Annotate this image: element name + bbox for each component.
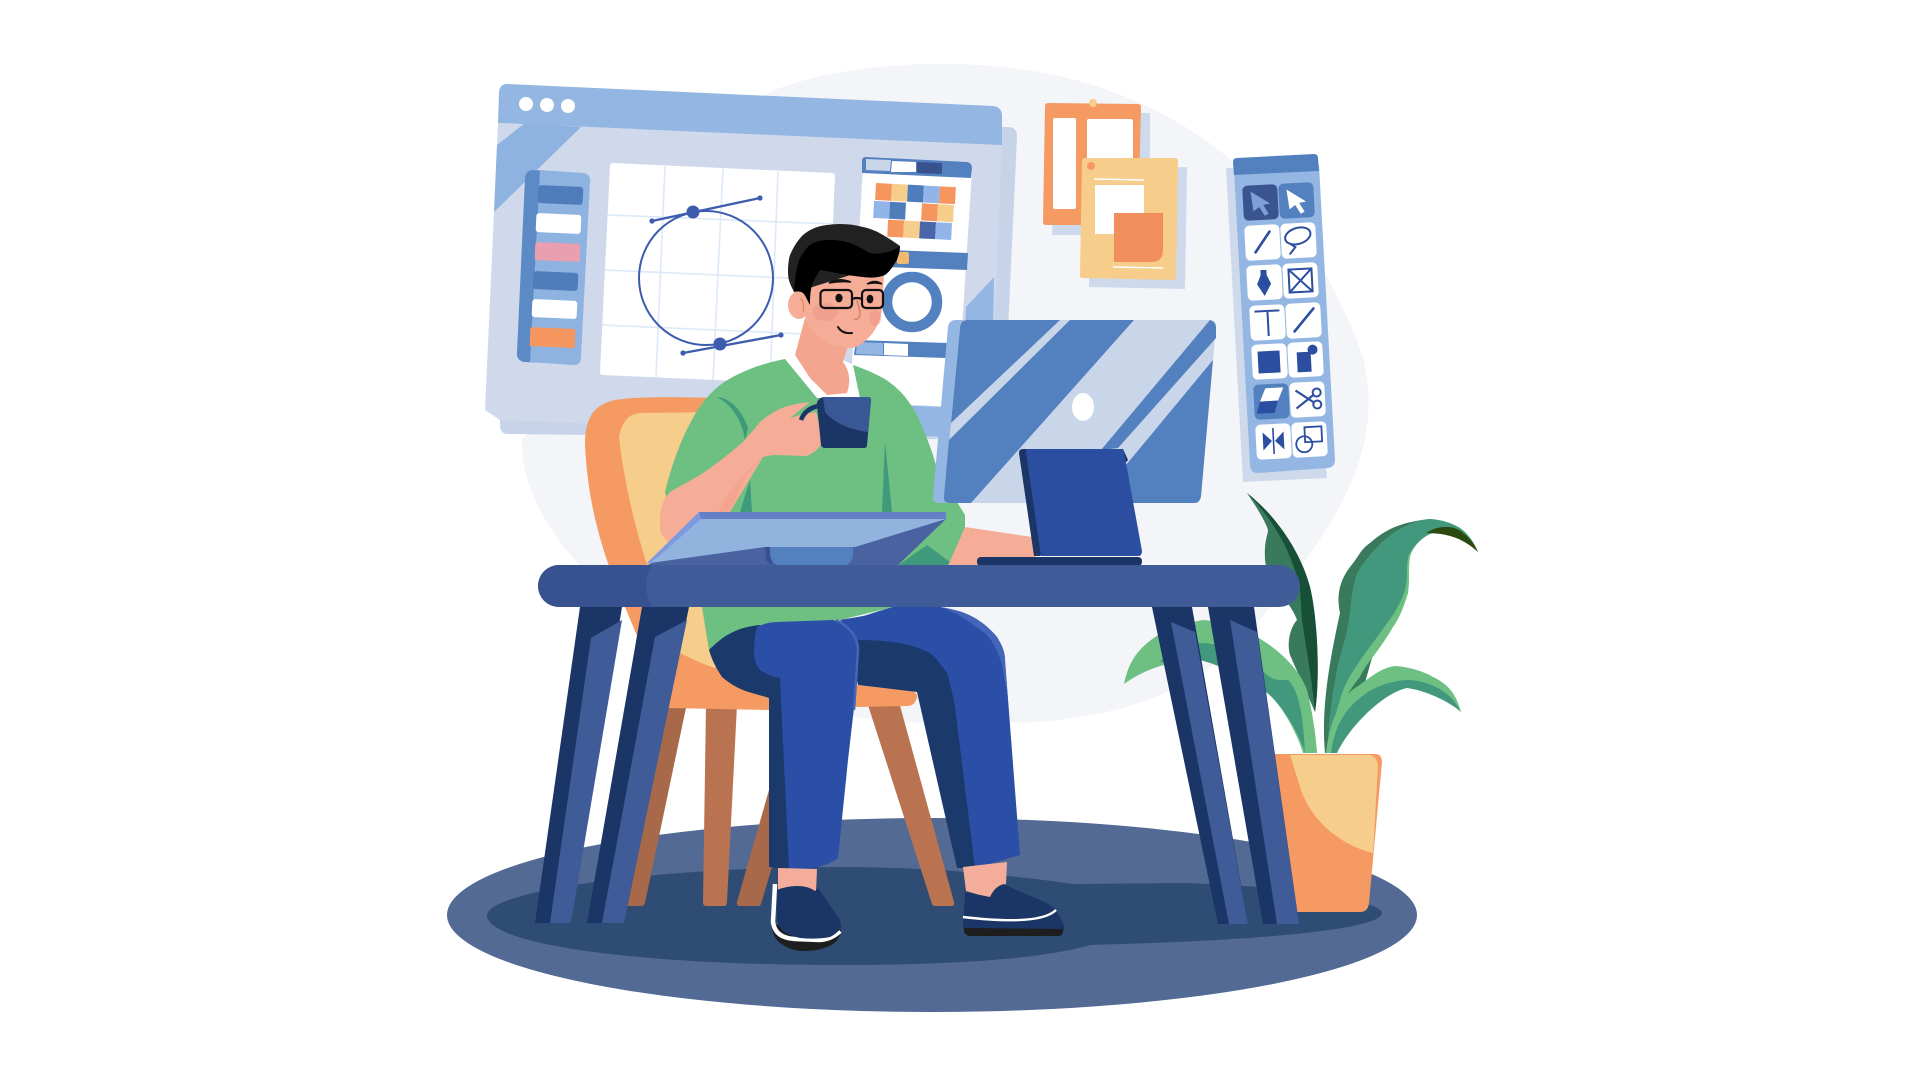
right leaf	[1326, 666, 1461, 753]
tool: shape with handle	[1287, 341, 1324, 378]
second right leg	[1208, 607, 1299, 924]
tool: eraser	[1253, 383, 1290, 420]
left leaf	[1124, 620, 1317, 753]
monitor	[933, 320, 1216, 503]
left leg	[535, 607, 622, 923]
tablet stand	[765, 547, 772, 566]
window title bar	[498, 84, 1002, 145]
tool: shape builder	[1291, 421, 1328, 458]
ankles	[778, 862, 1007, 898]
raised arm	[660, 402, 822, 543]
table legs	[535, 607, 1299, 924]
floor ellipse	[447, 818, 1417, 1012]
sticky note: orange	[1043, 99, 1150, 235]
tool: rectangle	[1251, 343, 1288, 380]
tool: pencil	[1244, 224, 1281, 261]
tool: pen nib	[1246, 264, 1283, 301]
face	[805, 268, 884, 348]
nose	[854, 300, 860, 319]
chair back and seat	[585, 397, 917, 710]
cheeks	[812, 303, 881, 326]
tool: line	[1285, 302, 1322, 339]
coffee mug	[801, 397, 871, 448]
panel: tool palette	[1226, 154, 1335, 482]
right shoe	[963, 884, 1064, 936]
tool: lasso	[1280, 222, 1317, 259]
laptop base	[977, 557, 1142, 566]
floor shadow	[487, 867, 1382, 965]
window control dots	[519, 97, 575, 113]
second left leg	[587, 607, 689, 923]
chair legs	[627, 702, 954, 906]
colour swatches	[872, 183, 956, 240]
ring chart	[887, 277, 937, 327]
collar	[785, 352, 860, 398]
big centre leaf	[1324, 519, 1478, 753]
plant	[1124, 493, 1478, 912]
panel: design app window	[485, 84, 1017, 440]
monitor reflection stripes	[944, 320, 1216, 503]
tool: type	[1249, 304, 1286, 341]
chair	[585, 397, 954, 906]
hair	[788, 224, 900, 305]
diagonal window stripe	[494, 123, 581, 212]
tool: selection arrow	[1242, 184, 1279, 221]
drawing tablet	[646, 512, 946, 566]
neck	[795, 318, 849, 395]
sticky note: yellow	[1080, 158, 1187, 289]
right leg	[1152, 607, 1248, 924]
tool: crossed frame	[1282, 262, 1319, 299]
tool: scissors	[1289, 381, 1326, 418]
bezier circle and handles	[639, 195, 784, 356]
pants	[709, 607, 1020, 870]
plant pot	[1272, 754, 1382, 912]
tool: direct selection	[1278, 182, 1315, 219]
eyebrows	[829, 280, 882, 284]
laptop	[977, 449, 1142, 566]
right swatch panel	[850, 157, 972, 407]
right forearm	[948, 527, 1038, 566]
shirt folds	[717, 397, 950, 566]
eyes	[835, 294, 873, 303]
smile	[838, 327, 852, 333]
ear	[788, 291, 810, 319]
monitor logo dot	[1072, 393, 1094, 421]
palette header	[1233, 154, 1319, 175]
desk top	[538, 565, 1300, 607]
shirt	[665, 359, 965, 650]
background blob	[522, 64, 1369, 724]
left layers panel	[517, 170, 590, 365]
glasses	[820, 290, 883, 308]
window scroll wedge	[965, 277, 994, 330]
left shoe	[771, 884, 841, 951]
chair cushion	[619, 412, 730, 668]
person	[660, 224, 1064, 951]
tool: reflect	[1255, 423, 1292, 460]
canvas with grid	[600, 163, 835, 385]
back dark leaf	[1247, 493, 1318, 712]
